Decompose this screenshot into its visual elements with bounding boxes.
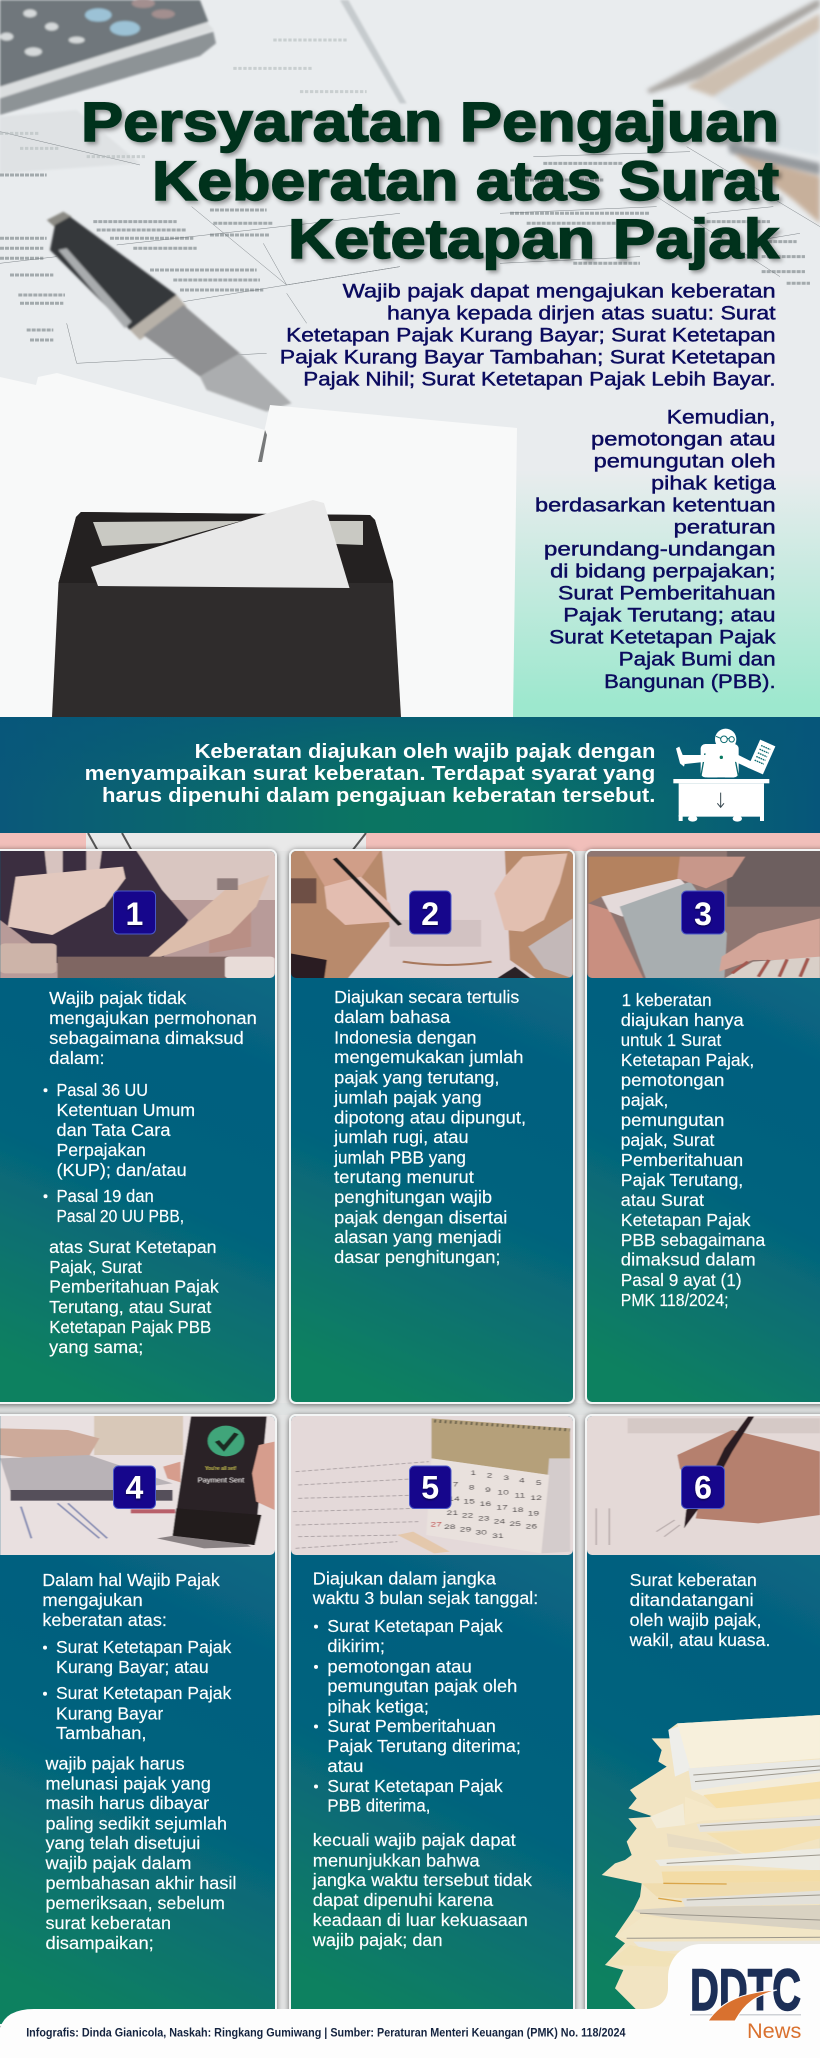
card 4 text: pemeriksaan, sebelum <box>46 1893 225 1913</box>
card 5 text: pihak ketiga; <box>327 1696 429 1716</box>
card 1 text: (KUP); dan/atau <box>56 1160 187 1180</box>
card 3 text: Ketetapan Pajak <box>621 1210 751 1230</box>
number badge 1 <box>114 891 156 934</box>
panel: card 3 <box>586 840 820 1403</box>
photo: notebook and desk calendar: 15 <box>463 1497 475 1505</box>
card 5 text: Surat Ketetapan Pajak <box>327 1776 503 1796</box>
number badge 5 <box>410 1466 451 1508</box>
photo: notebook and desk calendar: 8 <box>469 1484 475 1491</box>
logo: DDTC News <box>690 1958 801 2043</box>
card 6 text: oleh wajib pajak, <box>630 1610 762 1630</box>
card 2 text: pajak yang terutang, <box>334 1067 500 1087</box>
card 5 text: dikirim; <box>327 1636 385 1656</box>
card body <box>0 850 276 1403</box>
card 2 text: Indonesia dengan <box>334 1027 477 1047</box>
card 4 text: keberatan atas: <box>42 1610 167 1630</box>
header photo background <box>0 0 820 717</box>
card 5 text: Surat Pemberitahuan <box>327 1716 496 1736</box>
card 2 text: mengemukakan jumlah <box>334 1047 524 1067</box>
card 5 text: wajib pajak; dan <box>312 1930 442 1950</box>
card 3 text: PMK 118/2024; <box>621 1290 728 1310</box>
text block: second paragraph: pihak ketiga <box>651 472 776 494</box>
card 1 text: mengajukan permohonan <box>49 1008 257 1028</box>
icon: stack of paper files <box>602 1715 820 2010</box>
number badge 6: 6 <box>694 1470 712 1506</box>
text block: intro paragraph: Pajak Kurang Bayar Tambahan; Surat Ketetapan <box>280 347 776 369</box>
card 2 text <box>333 987 526 1267</box>
photo: notebook and desk calendar: 3 <box>503 1474 509 1482</box>
card 4 text: paling sedikit sejumlah <box>46 1813 227 1833</box>
text block: second paragraph: peraturan <box>674 516 776 538</box>
logo: DDTC News: News <box>747 2020 801 2043</box>
card 3 text: dimaksud dalam <box>621 1250 756 1270</box>
card 4 text: Surat Ketetapan Pajak <box>56 1637 231 1657</box>
text block: second paragraph: perundang-undangan <box>544 538 776 560</box>
number badge 1: 1 <box>126 896 143 932</box>
card 2 text: dasar penghitungan; <box>334 1247 500 1267</box>
card 1 text: Ketetapan Pajak PBB <box>49 1317 211 1337</box>
text block: intro paragraph: Ketetapan Pajak Kurang Bayar; Surat Ketetapan <box>286 325 776 347</box>
photo: notebook and desk calendar: 28 <box>444 1523 456 1531</box>
photo: notebook and desk calendar: 29 <box>460 1526 471 1533</box>
card 1 text: Pajak, Surat <box>49 1257 142 1277</box>
photo: notebook and desk calendar: 14 <box>448 1495 460 1503</box>
card 2 text: terutang menurut <box>334 1167 474 1187</box>
card 4 text: Kurang Bayar; atau <box>56 1657 209 1677</box>
card 1 text: Wajib pajak tidak <box>49 988 186 1008</box>
card 1 text: Perpajakan <box>56 1140 146 1160</box>
banner text <box>85 741 655 807</box>
card 5 text: kecuali wajib pajak dapat <box>313 1830 516 1850</box>
number badge 4 <box>114 1466 156 1508</box>
photo: notebook and desk calendar: 16 <box>480 1500 491 1508</box>
card 3 text: untuk 1 Surat <box>621 1030 721 1050</box>
text block: second paragraph <box>535 406 776 693</box>
photo: notebook and desk calendar: 2 <box>487 1471 493 1479</box>
card 4 text: Tambahan, <box>56 1723 146 1743</box>
card 5 text: menunjukkan bahwa <box>313 1850 480 1870</box>
text block: second paragraph: Bangunan (PBB). <box>604 671 776 693</box>
card 1 text: Ketentuan Umum <box>56 1100 195 1120</box>
card 1 text: Pasal 20 UU PBB, <box>56 1206 184 1226</box>
card 4 text: Dalam hal Wajib Pajak <box>42 1570 220 1590</box>
card 5 text: Surat Ketetapan Pajak <box>327 1616 503 1636</box>
banner text: harus dipenuhi dalam pengajuan keberatan tersebut. <box>102 785 655 807</box>
number badge 6 <box>682 1466 724 1508</box>
card 3 text: pemungutan <box>621 1110 724 1130</box>
photo: notebook and desk calendar: 31 <box>492 1532 504 1540</box>
card 6 text: wakil, atau kuasa. <box>629 1630 770 1650</box>
card 2 text: jumlah rugi, atau <box>333 1127 469 1147</box>
photo: notebook and desk calendar: 21 <box>447 1509 458 1517</box>
text block: intro paragraph: Pajak Nihil; Surat Ketetapan Pajak Lebih Bayar. <box>303 369 776 391</box>
card 2 text: Diajukan secara tertulis <box>334 987 520 1007</box>
card 4 text <box>42 1570 236 1953</box>
text block: second paragraph: Pajak Terutang; atau <box>563 605 776 627</box>
photo: notebook and desk calendar: 30 <box>475 1529 487 1536</box>
photo: hand signing with pen <box>587 1416 820 1555</box>
card 3 text: Pajak Terutang, <box>621 1170 743 1190</box>
card 3 text <box>621 990 765 1310</box>
photo: notebook and desk calendar: 1 <box>470 1469 476 1477</box>
photo: phone showing payment sent: You're all set! <box>205 1466 236 1472</box>
card body <box>290 1415 574 2025</box>
card 2 text: jumlah PBB yang <box>333 1147 466 1167</box>
card 5 text: keadaan di luar kekuasaan <box>313 1910 528 1930</box>
card 2 text: dipotong atau dipungut, <box>334 1107 526 1127</box>
card 1 text: Pemberitahuan Pajak <box>49 1277 219 1297</box>
panel: card 2 <box>288 840 575 1403</box>
icon: white papers and black envelope <box>0 373 517 717</box>
photo: hands filing documents <box>586 840 820 978</box>
panel: card 5 <box>288 1395 575 2025</box>
text block: second paragraph: Pajak Bumi dan <box>619 649 776 671</box>
card 5 text: Pajak Terutang diterima; <box>327 1736 521 1756</box>
number badge 3 <box>682 891 724 934</box>
photo: notebook and desk calendar: 4 <box>519 1476 525 1484</box>
photo: notebook and desk calendar: 12 <box>530 1494 542 1502</box>
card 2 text: penghitungan wajib <box>334 1187 492 1207</box>
photo: notebook and desk calendar: 26 <box>526 1523 537 1530</box>
photo: notebook and desk calendar: 23 <box>478 1514 490 1522</box>
text block: intro paragraph <box>280 280 776 391</box>
banner <box>0 717 820 833</box>
card 1 text: yang sama; <box>49 1337 143 1357</box>
card 5 text <box>312 1568 538 1950</box>
card 4 text: disampaikan; <box>46 1933 154 1953</box>
text block: second paragraph: di bidang perpajakan; <box>550 561 776 583</box>
card 1 text: Terutang, atau Surat <box>49 1297 211 1317</box>
photo: notebook and desk calendar: 27 <box>430 1521 442 1528</box>
photo: notebook and desk calendar: 25 <box>509 1520 521 1528</box>
card 4 text: wajib pajak dalam <box>44 1853 191 1873</box>
card 3 text: pemotongan <box>621 1070 724 1090</box>
title: Persyaratan Pengajuan <box>81 90 779 153</box>
text block: intro paragraph: hanya kepada dirjen atas suatu: Surat <box>387 303 776 325</box>
title <box>81 90 780 270</box>
photo: notebook and desk calendar: 10 <box>497 1489 509 1496</box>
card 2 text: jumlah pajak yang <box>333 1088 482 1108</box>
card 1 text: atas Surat Ketetapan <box>49 1237 217 1257</box>
card 1 text: Pasal 19 dan <box>56 1186 154 1206</box>
card 5 text: pemotongan atau <box>327 1656 472 1676</box>
photo: notebook and desk calendar: 7 <box>453 1481 459 1488</box>
card 3 text: PBB sebagaimana <box>621 1230 765 1250</box>
text block: second paragraph: Surat Ketetapan Pajak <box>549 627 776 649</box>
card 4 text: Surat Ketetapan Pajak <box>56 1683 231 1703</box>
card 4 text: yang telah disetujui <box>46 1833 200 1853</box>
footer bar <box>0 1944 820 2058</box>
number badge 2 <box>410 891 451 934</box>
card 3 text: pajak, <box>621 1090 668 1110</box>
card 2 text: dalam bahasa <box>334 1007 451 1027</box>
photo: notebook and desk calendar: 5 <box>536 1479 542 1487</box>
card 6 text: ditandatangani <box>630 1590 754 1610</box>
card 5 text: jangka waktu tersebut tidak <box>312 1870 532 1890</box>
number badge 2: 2 <box>421 896 439 932</box>
card 5 text: atau <box>327 1756 364 1776</box>
panel: card 1 <box>0 840 282 1403</box>
card 5 text: dapat dipenuhi karena <box>313 1890 493 1910</box>
icon: pen on documents <box>47 212 292 412</box>
card 3 text: 1 keberatan <box>622 990 712 1010</box>
panel: card 6 <box>586 1395 820 2025</box>
photo: notebook and desk calendar: 17 <box>496 1503 508 1511</box>
card 4 text: Kurang Bayar <box>56 1703 163 1723</box>
card body <box>586 850 820 1403</box>
card 4 text: wajib pajak harus <box>44 1753 185 1773</box>
photo: hands holding documents <box>0 851 275 978</box>
lower page background <box>0 833 820 2058</box>
photo: notebook and desk calendar: 9 <box>485 1486 491 1494</box>
panel: card 4 <box>0 1395 282 2025</box>
photo: notebook and desk calendar <box>291 1416 573 1555</box>
card body <box>586 1415 820 2025</box>
photo: notebook and desk calendar: 19 <box>528 1509 539 1517</box>
card 4 text: pembahasan akhir hasil <box>46 1873 236 1893</box>
photo: notebook and desk calendar: 18 <box>512 1506 524 1514</box>
card 5 text: Diajukan dalam jangka <box>313 1568 496 1588</box>
banner text: Keberatan diajukan oleh wajib pajak dengan <box>195 741 655 763</box>
card 3 text: pajak, Surat <box>621 1130 715 1150</box>
text block: second paragraph: Surat Pemberitahuan <box>558 583 776 605</box>
card 4 text: mengajukan <box>42 1590 143 1610</box>
icon: official at desk <box>673 729 775 822</box>
card 3 text: Ketetapan Pajak, <box>621 1050 754 1070</box>
card 1 text: Pasal 36 UU <box>56 1080 148 1100</box>
card 1 text: sebagaimana dimaksud <box>49 1028 244 1048</box>
card 1 text <box>44 988 257 1357</box>
photo: phone showing payment sent <box>0 1416 275 1555</box>
card 4 text: melunasi pajak yang <box>46 1774 211 1794</box>
footer credits: Infografis: Dinda Gianicola, Naskah: Ringkang Gumiwang | Sumber: Peraturan Menteri Keuangan (PMK) No. 118/2024 <box>26 2026 626 2040</box>
card 3 text: diajukan hanya <box>621 1010 744 1030</box>
card body <box>290 850 574 1403</box>
text block: second paragraph: pemungutan oleh <box>594 450 776 472</box>
card 5 text: pemungutan pajak oleh <box>327 1676 517 1696</box>
title: Ketetapan Pajak <box>288 207 780 270</box>
card 1 text: dalam: <box>49 1048 105 1068</box>
photo: notebook and desk calendar: 11 <box>514 1491 525 1499</box>
card 4 text: masih harus dibayar <box>46 1793 209 1813</box>
number badge 4: 4 <box>126 1470 144 1506</box>
card 3 text: atau Surat <box>621 1190 704 1210</box>
photo: notebook and desk calendar: 24 <box>494 1517 505 1525</box>
photo: hand signing document <box>288 840 575 978</box>
photo: notebook and desk calendar: 22 <box>462 1512 474 1519</box>
card 4 text: surat keberatan <box>46 1913 171 1933</box>
card 6 text: Surat keberatan <box>630 1570 757 1590</box>
card 2 text: alasan yang menjadi <box>334 1227 502 1247</box>
number badge 5: 5 <box>421 1470 439 1506</box>
photo: phone showing payment sent: Payment Sent <box>198 1476 245 1484</box>
banner text: menyampaikan surat keberatan. Terdapat syarat yang <box>85 763 655 785</box>
card 3 text: Pemberitahuan <box>621 1150 743 1170</box>
card 3 text: Pasal 9 ayat (1) <box>621 1270 742 1290</box>
card body <box>0 1415 276 2025</box>
number badge 3: 3 <box>694 896 712 932</box>
text block: second paragraph: Kemudian, <box>667 406 776 428</box>
title: Keberatan atas Surat <box>152 149 779 212</box>
text block: second paragraph: pemotongan atau <box>591 428 776 450</box>
card 5 text: PBB diterima, <box>327 1796 430 1816</box>
card 6 text <box>629 1570 770 1650</box>
card 2 text: pajak dengan disertai <box>334 1207 507 1227</box>
card 5 text: waktu 3 bulan sejak tanggal: <box>312 1588 538 1608</box>
text block: second paragraph: berdasarkan ketentuan <box>535 494 776 516</box>
card 1 text: dan Tata Cara <box>56 1120 171 1140</box>
text block: intro paragraph: Wajib pajak dapat mengajukan keberatan <box>343 280 776 302</box>
